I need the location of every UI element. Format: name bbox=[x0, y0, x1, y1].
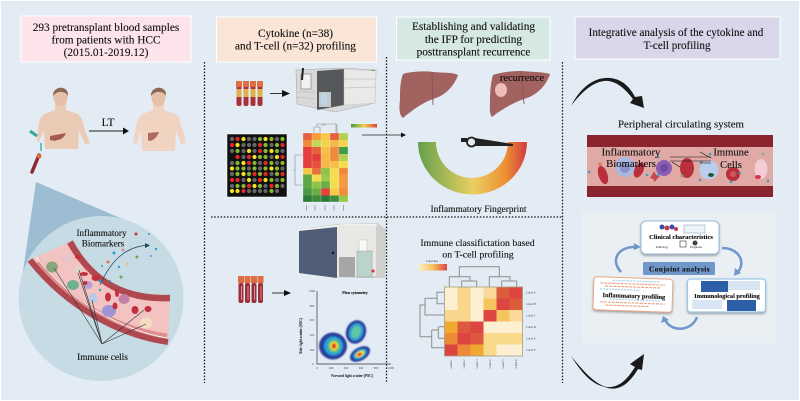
card: clinical characteristics: Prognosis bbox=[690, 245, 703, 249]
title: establishing the IFP: posttransplant recurrence bbox=[417, 46, 530, 58]
arrow: top curve bbox=[571, 78, 644, 108]
chart: T-cell heatmap: Label 5 bbox=[501, 359, 505, 369]
arrow: clinical to immunological bbox=[722, 248, 741, 276]
title: cytokine and T-cell profiling: Cytokine (n=38) bbox=[258, 28, 333, 40]
arrow: tubes to cytometry bbox=[272, 290, 291, 296]
arrow: tubes to analyzer bbox=[270, 90, 290, 97]
arrow: LT: LT bbox=[102, 117, 114, 129]
card: clinical characteristics: Pathology bbox=[656, 245, 669, 249]
label: inflammatory fingerprint: Inflammatory Fingerprint bbox=[430, 204, 527, 215]
label: conjoint analysis: Conjoint analysis bbox=[649, 264, 710, 274]
dotted dividers bbox=[204, 57, 562, 383]
arrow: immunological to inflammatory bbox=[661, 316, 697, 329]
label: inflammatory biomarkers bbox=[76, 228, 127, 248]
chart: flow cytometry scatter: 800 bbox=[310, 304, 315, 308]
chart: T-cell heatmap bbox=[418, 259, 537, 369]
card: inflammatory profiling: Inflammatory profiling bbox=[602, 292, 666, 301]
card: clinical characteristics: Clinical characteristics bbox=[649, 234, 713, 241]
title: blood samples bbox=[21, 16, 191, 62]
chart: flow cytometry scatter: 400 bbox=[310, 333, 315, 337]
panel: IFP establishing and validating bbox=[396, 17, 551, 215]
chart: T-cell heatmap: Label A bbox=[526, 290, 537, 294]
heading: immune classification bbox=[420, 238, 535, 260]
chart: flow cytometry scatter: Side light scatter (SSC) bbox=[299, 317, 303, 354]
heading: peripheral circulating system: Peripheral circulating system bbox=[618, 118, 745, 130]
chart: T-cell heatmap: Label 4 bbox=[488, 359, 492, 369]
icon: T-cell blood tubes bbox=[238, 276, 264, 303]
panel: T-cell profiling bbox=[212, 220, 537, 385]
chart: flow cytometry scatter: 200 bbox=[329, 366, 334, 370]
title: integrative analysis: Integrative analysis of the cytokine and bbox=[589, 27, 764, 39]
chart: cytokine heatmap bbox=[293, 124, 377, 211]
chart: flow cytometry scatter: Flow cytometry bbox=[342, 291, 368, 295]
chart: flow cytometry scatter: 1000 bbox=[309, 289, 316, 293]
panel: conjoint analysis bbox=[582, 211, 776, 343]
chart: T-cell heatmap: Label 1 bbox=[449, 359, 453, 369]
arrow: LT bbox=[89, 117, 129, 134]
chart: flow cytometry scatter bbox=[299, 289, 394, 378]
chart: T-cell heatmap: Label C bbox=[526, 314, 536, 318]
illustration: blood vessel cross-section: Immune bbox=[713, 148, 749, 158]
chart: inflammatory fingerprint gauge bbox=[418, 138, 527, 194]
panel: patient samples bbox=[1, 1, 203, 400]
title: blood samples: from patients with HCC bbox=[52, 34, 160, 46]
title: establishing the IFP bbox=[396, 17, 550, 60]
title: integrative analysis bbox=[575, 17, 780, 59]
arrow: clinical to inflammatory bbox=[616, 243, 641, 272]
chart: flow cytometry scatter: 0 bbox=[312, 362, 314, 366]
chart: T-cell heatmap: Color key bbox=[426, 259, 438, 263]
panel: integrative analysis bbox=[571, 17, 780, 389]
icon: recurrence liver bbox=[490, 71, 550, 117]
illustration: blood vessel magnifier bbox=[18, 182, 184, 381]
icon: healthy liver bbox=[399, 71, 458, 118]
label: immune cells: Immune cells bbox=[77, 353, 128, 363]
heading: immune classification: Immune classifictation based bbox=[420, 238, 535, 249]
label: conjoint analysis bbox=[643, 262, 715, 275]
chart: T-cell heatmap: Label 6 bbox=[514, 359, 518, 369]
illustration: blood vessel cross-section bbox=[587, 135, 773, 197]
chart: flow cytometry scatter: 800 bbox=[374, 366, 379, 370]
title: integrative analysis: T-cell profiling bbox=[643, 40, 711, 52]
chart: T-cell heatmap: Label F bbox=[526, 348, 536, 352]
panel: cytokine profiling bbox=[212, 16, 406, 216]
title: cytokine and T-cell profiling: and T-cell (n=32) profiling bbox=[235, 40, 356, 52]
label: inflammatory biomarkers: Biomarkers bbox=[82, 238, 125, 248]
chart: T-cell heatmap: Label 2 bbox=[462, 359, 466, 369]
icon: flow cytometer bbox=[299, 223, 386, 278]
title: establishing the IFP: the IFP for predicting bbox=[425, 34, 522, 46]
chart: microarray dots bbox=[227, 134, 287, 197]
illustration: blood vessel cross-section: Biomarkers bbox=[606, 158, 656, 170]
card: immunological profiling: Immunological profiling bbox=[694, 293, 761, 300]
icon: patient after transplant bbox=[133, 88, 186, 151]
illustration: blood vessel cross-section: Inflammatory bbox=[602, 146, 661, 158]
card: clinical characteristics bbox=[641, 221, 719, 254]
title: blood samples: 293 pretransplant blood samples bbox=[33, 22, 179, 34]
heading: immune classification: on T-cell profiling bbox=[442, 250, 514, 260]
chart: T-cell heatmap: Label E bbox=[526, 336, 536, 340]
title: cytokine and T-cell profiling bbox=[216, 17, 376, 62]
illustration: blood vessel cross-section: Cells bbox=[720, 160, 742, 171]
chart: flow cytometry scatter: 1000 bbox=[388, 366, 394, 370]
chart: T-cell heatmap: Label 3 bbox=[475, 359, 479, 369]
arrow: bottom curve bbox=[571, 354, 644, 389]
chart: flow cytometry scatter: 0 bbox=[316, 366, 318, 370]
title: blood samples: (2015.01-2019.12) bbox=[64, 47, 149, 59]
chart: flow cytometry scatter: 200 bbox=[310, 348, 315, 352]
chart: flow cytometry scatter: Forward light scatter (FSC) bbox=[331, 374, 374, 378]
icon: cytokine analyzer bbox=[296, 68, 376, 112]
card: inflammatory profiling bbox=[593, 277, 673, 312]
card: immunological profiling bbox=[688, 279, 766, 312]
title: establishing the IFP: Establishing and validating bbox=[412, 21, 535, 33]
chart: flow cytometry scatter: 600 bbox=[310, 318, 315, 322]
icon: blood tubes bbox=[236, 81, 263, 106]
chart: flow cytometry scatter: 400 bbox=[344, 366, 349, 370]
chart: flow cytometry scatter: 600 bbox=[359, 366, 364, 370]
icon: patient before transplant bbox=[30, 88, 90, 172]
chart: T-cell heatmap: Label D bbox=[526, 325, 537, 329]
chart: T-cell heatmap: Label B bbox=[526, 302, 536, 306]
arrow: heatmap to gauge bbox=[362, 132, 406, 138]
icon: recurrence liver: recurrence bbox=[500, 73, 544, 84]
label: inflammatory biomarkers: Inflammatory bbox=[76, 228, 127, 238]
